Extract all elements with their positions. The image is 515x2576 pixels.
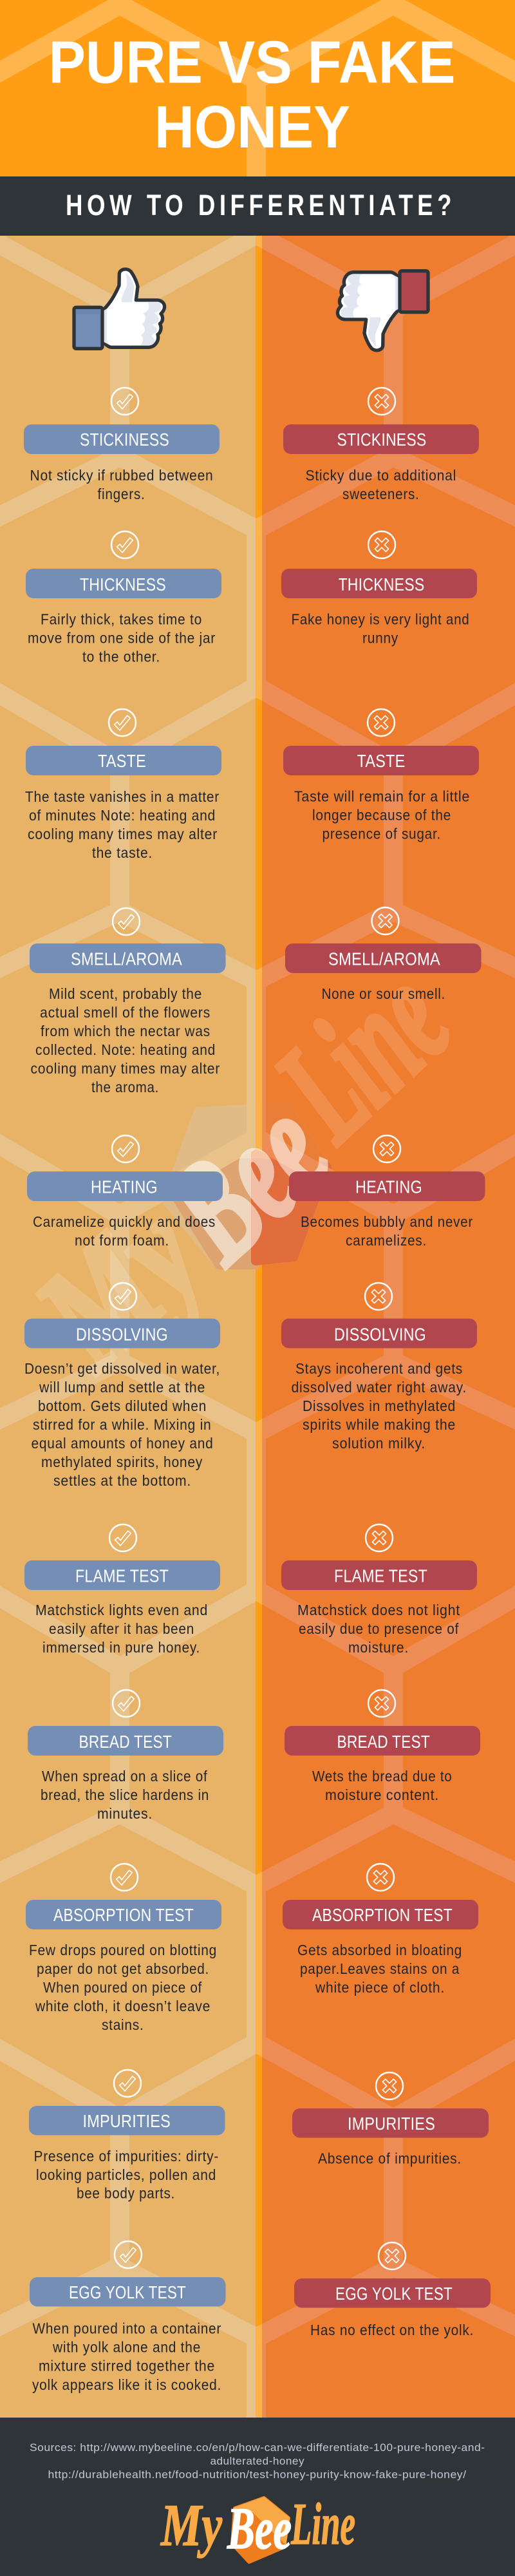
description: easily due to presence of	[299, 1620, 459, 1637]
icon: cross	[365, 1283, 392, 1310]
label pill	[281, 569, 477, 598]
description: paper do not get absorbed.	[37, 1960, 209, 1977]
label pill: BREAD TEST	[337, 1732, 430, 1752]
description: immersed in pure honey.	[42, 1639, 200, 1656]
watermark logo text	[1, 936, 488, 1406]
section: bread test pure	[28, 1690, 223, 1822]
label pill: SMELL/AROMA	[328, 949, 440, 969]
section: thickness fake	[281, 531, 477, 647]
label pill: FLAME TEST	[334, 1566, 427, 1586]
description: Absence of impurities.	[318, 2150, 462, 2166]
section: dissolving pure	[24, 1283, 220, 1489]
description: the taste.	[92, 844, 153, 861]
description: When spread on a slice of	[42, 1768, 207, 1785]
description: Sticky due to additional	[305, 467, 456, 484]
description	[28, 611, 216, 665]
label pill: DISSOLVING	[334, 1324, 426, 1345]
description: white cloth, it doesn’t leave	[35, 1998, 211, 2014]
label pill: BREAD TEST	[79, 1732, 172, 1752]
section: taste fake	[283, 709, 479, 842]
label pill	[26, 569, 221, 598]
description: Matchstick does not light	[297, 1602, 460, 1618]
description: to the other.	[82, 648, 160, 665]
description: When poured into a container	[32, 2320, 221, 2336]
description: paper.Leaves stains on a	[300, 1960, 460, 1977]
section: absorption test pure	[26, 1864, 221, 2033]
icon: cross	[379, 2242, 406, 2269]
description: with yolk alone and the	[52, 2339, 201, 2356]
description: The taste vanishes in a matter	[25, 788, 220, 805]
label pill: STICKINESS	[337, 430, 426, 450]
icon: check	[114, 2070, 141, 2097]
label pill	[283, 424, 479, 454]
description: longer because of the	[312, 806, 451, 823]
section: absorption test fake	[283, 1864, 478, 1996]
description: moisture.	[348, 1639, 409, 1656]
title: HONEY	[154, 93, 350, 160]
description: Gets absorbed in bloating	[297, 1942, 462, 1958]
section: taste pure	[25, 709, 221, 861]
sources: http://durablehealth.net/food-nutrition/test-honey-purity-know-fake-pure-honey/	[48, 2468, 466, 2481]
description: Matchstick lights even and	[35, 1602, 208, 1618]
description: Has no effect on the yolk.	[310, 2322, 474, 2338]
description: equal amounts of honey and	[31, 1435, 214, 1452]
section: impurities pure	[29, 2070, 225, 2201]
label pill	[285, 943, 482, 973]
label pill	[28, 1726, 223, 1756]
label pill	[24, 424, 220, 454]
label pill: IMPURITIES	[82, 2111, 171, 2131]
icon: cross	[368, 709, 395, 736]
icon: check	[109, 1283, 136, 1310]
description	[24, 1360, 220, 1489]
description: settles at the bottom.	[53, 1472, 191, 1489]
description: fingers.	[98, 486, 145, 502]
description	[305, 467, 456, 502]
description	[33, 1213, 216, 1249]
description: spirits while making the	[303, 1416, 456, 1433]
description	[312, 1768, 452, 1803]
section: stickiness fake	[283, 388, 479, 502]
description: mixture stirred together the	[39, 2357, 215, 2374]
section: heating pure	[27, 1135, 223, 1249]
label pill: ABSORPTION TEST	[312, 1905, 453, 1925]
description: methylated spirits, honey	[41, 1454, 203, 1470]
label pill	[26, 1900, 221, 1929]
description: Doesn’t get dissolved in water,	[24, 1360, 220, 1377]
description: Fake honey is very light and	[291, 611, 470, 627]
description	[33, 2148, 219, 2201]
title	[49, 28, 456, 160]
description: cooling many times may alter	[28, 826, 218, 842]
section: smell pure	[30, 908, 225, 1095]
sources	[30, 2441, 485, 2481]
icon: thumbs up	[74, 269, 165, 348]
description: will lump and settle at the	[39, 1379, 205, 1396]
label pill: HEATING	[91, 1177, 158, 1197]
section: heating fake	[289, 1135, 485, 1249]
label pill	[24, 1319, 220, 1349]
label pill: IMPURITIES	[348, 2114, 435, 2134]
description: Stays incoherent and gets	[295, 1360, 463, 1377]
subtitle bar	[0, 176, 515, 236]
label pill	[30, 943, 225, 973]
section: egg yolk test fake	[294, 2242, 491, 2338]
description	[297, 1942, 462, 1996]
description: Few drops poured on blotting	[29, 1942, 217, 1958]
sources: adulterated-honey	[210, 2455, 304, 2467]
icon: check	[113, 908, 140, 935]
sources: Sources: http://www.mybeeline.co/en/p/how-can-we-differentiate-100-pure-honey-and-	[30, 2441, 485, 2454]
icon: check	[111, 1864, 138, 1891]
description	[291, 611, 470, 647]
label pill	[283, 746, 479, 775]
label pill	[29, 2106, 225, 2136]
icon: cross	[376, 2072, 403, 2099]
description: the aroma.	[91, 1079, 159, 1095]
description: move from one side of the jar	[28, 630, 216, 647]
icon: check	[109, 709, 136, 736]
section: smell fake	[285, 907, 482, 1002]
description: cooling many times may alter	[31, 1060, 220, 1077]
logo: My	[160, 2492, 223, 2558]
header panel	[0, 0, 515, 176]
label pill: FLAME TEST	[75, 1566, 169, 1586]
label pill	[292, 2108, 489, 2138]
description	[301, 1213, 473, 1249]
description: runny	[362, 630, 398, 647]
description: Dissolves in methylated	[303, 1397, 456, 1414]
label pill: TASTE	[98, 751, 146, 771]
description: caramelizes.	[346, 1232, 427, 1249]
section: flame test pure	[24, 1524, 220, 1656]
label pill: THICKNESS	[339, 574, 425, 594]
description: Not sticky if rubbed between	[30, 467, 214, 484]
description: Wets the bread due to	[312, 1768, 452, 1785]
description: When poured on piece of	[43, 1979, 202, 1996]
icon: check	[111, 531, 138, 558]
description	[25, 788, 220, 861]
description: solution milky.	[332, 1435, 426, 1452]
icon: cross	[368, 1690, 395, 1717]
description: actual smell of the flowers	[40, 1004, 211, 1021]
description: easily after it has been	[49, 1620, 194, 1637]
label pill	[27, 1171, 223, 1201]
section: flame test fake	[281, 1524, 477, 1656]
section: bread test fake	[285, 1690, 480, 1803]
label pill: THICKNESS	[80, 574, 166, 594]
icon: check	[109, 1524, 136, 1551]
icon: cross	[367, 1864, 394, 1891]
description	[35, 1602, 208, 1656]
description: stirred for a while. Mixing in	[33, 1416, 211, 1433]
section: stickiness pure	[24, 388, 220, 502]
label pill: TASTE	[357, 751, 406, 771]
icon: cross	[372, 907, 399, 934]
label pill: SMELL/AROMA	[71, 949, 182, 969]
description: collected. Note: heating and	[35, 1041, 216, 1058]
description	[294, 788, 470, 842]
description	[291, 1360, 467, 1452]
label pill	[289, 1171, 485, 1201]
description: sweeteners.	[342, 486, 420, 502]
label pill: DISSOLVING	[76, 1324, 168, 1345]
description: yolk appears like it is cooked.	[32, 2376, 221, 2393]
watermark logo text: Bee	[135, 1068, 358, 1292]
section: thickness pure	[26, 531, 221, 665]
icon: check	[113, 1690, 140, 1717]
description: from which the nectar was	[41, 1023, 211, 1039]
icon: check	[115, 2241, 142, 2268]
description: Caramelize quickly and does	[33, 1213, 216, 1230]
label pill: HEATING	[355, 1177, 422, 1197]
description: not form foam.	[75, 1232, 169, 1249]
title: PURE VS FAKE	[49, 28, 456, 95]
icon: check	[111, 388, 138, 415]
description: Becomes bubbly and never	[301, 1213, 473, 1230]
watermark logo text: My	[3, 1171, 232, 1400]
description: presence of sugar.	[322, 826, 441, 842]
icon: cross	[368, 531, 395, 558]
description: stains.	[102, 2016, 144, 2033]
description	[32, 2320, 221, 2393]
label pill	[281, 1560, 477, 1590]
icon: cross	[368, 388, 395, 415]
panel: fake honey column background	[262, 236, 515, 2418]
icon: cross	[366, 1524, 393, 1551]
icon: cross	[373, 1135, 400, 1162]
description: Fairly thick, takes time to	[41, 611, 202, 627]
description: dissolved water right away.	[291, 1379, 467, 1396]
section: egg yolk test pure	[30, 2241, 225, 2393]
section: dissolving fake	[281, 1283, 477, 1452]
description: bee body parts.	[77, 2184, 175, 2201]
label pill	[294, 2278, 491, 2308]
label pill: ABSORPTION TEST	[53, 1905, 194, 1925]
description: minutes.	[97, 1805, 153, 1822]
icon: check	[112, 1135, 139, 1162]
description	[30, 467, 214, 502]
description	[297, 1602, 460, 1656]
panel: centre gutter	[256, 236, 262, 2418]
description: moisture content.	[325, 1786, 439, 1803]
panel: pure honey column background	[0, 236, 256, 2418]
description: Mild scent, probably the	[49, 985, 202, 1002]
label pill: EGG YOLK TEST	[69, 2282, 186, 2302]
label pill: EGG YOLK TEST	[335, 2284, 453, 2304]
description: Taste will remain for a little	[294, 788, 470, 805]
label pill	[24, 1560, 220, 1590]
label pill	[283, 1900, 478, 1929]
description: Presence of impurities: dirty-	[33, 2148, 219, 2164]
description: of minutes Note: heating and	[29, 807, 216, 824]
description: None or sour smell.	[322, 985, 445, 1002]
description: bottom. Gets diluted when	[38, 1397, 207, 1414]
description: white piece of cloth.	[315, 1979, 445, 1996]
label pill	[281, 1319, 477, 1349]
section: impurities fake	[292, 2072, 489, 2166]
logo: Bee	[227, 2496, 292, 2561]
description	[41, 1768, 209, 1822]
label pill: STICKINESS	[80, 430, 169, 450]
description: bread, the slice hardens in	[41, 1786, 209, 1803]
label pill	[285, 1726, 480, 1756]
logo	[160, 2491, 355, 2562]
label pill	[26, 746, 221, 775]
footer panel	[0, 2418, 515, 2576]
description: looking particles, pollen and	[36, 2166, 216, 2183]
logo: Line	[290, 2491, 355, 2557]
icon: thumbs down	[337, 271, 428, 350]
description	[29, 1942, 217, 2033]
description	[31, 985, 220, 1095]
watermark hexagon	[166, 1107, 327, 1265]
label pill	[30, 2277, 225, 2307]
